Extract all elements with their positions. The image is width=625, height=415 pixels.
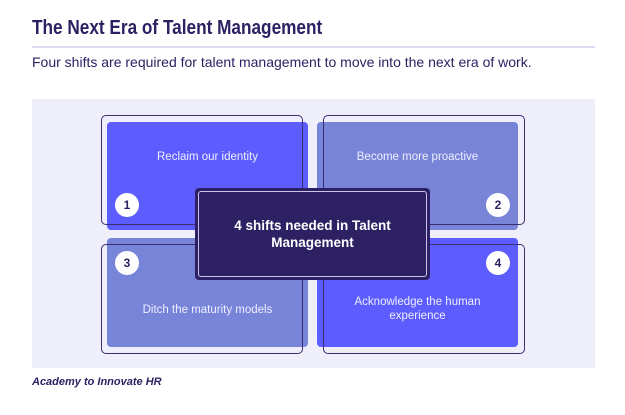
- card 4: Acknowledge the human: [355, 296, 480, 308]
- title: The Next Era of Talent Management: [32, 17, 322, 39]
- center callout: Management: [271, 235, 354, 250]
- number 2: 2: [495, 198, 501, 212]
- card 1: Reclaim our identity: [157, 151, 258, 163]
- number 4: 4: [495, 256, 501, 270]
- card 2: [317, 122, 518, 230]
- number 3: [115, 251, 139, 275]
- card 4: [317, 238, 518, 347]
- center callout: [195, 188, 430, 280]
- panel: diagram background: [32, 99, 595, 368]
- card 3: [107, 238, 308, 347]
- number 3: 3: [124, 256, 130, 270]
- subtitle: Four shifts are required for talent management to move into the next era of work.: [32, 54, 532, 70]
- card 1: [107, 122, 308, 230]
- center callout: 4 shifts needed in Talent: [234, 218, 391, 233]
- number 1: [115, 193, 139, 217]
- card 4: experience: [389, 310, 446, 322]
- card 2: Become more proactive: [357, 151, 478, 163]
- footer source: Academy to Innovate HR: [32, 376, 162, 388]
- card 3: Ditch the maturity models: [143, 304, 272, 316]
- number 1: 1: [124, 198, 130, 212]
- number 4: [486, 251, 510, 275]
- number 2: [486, 193, 510, 217]
